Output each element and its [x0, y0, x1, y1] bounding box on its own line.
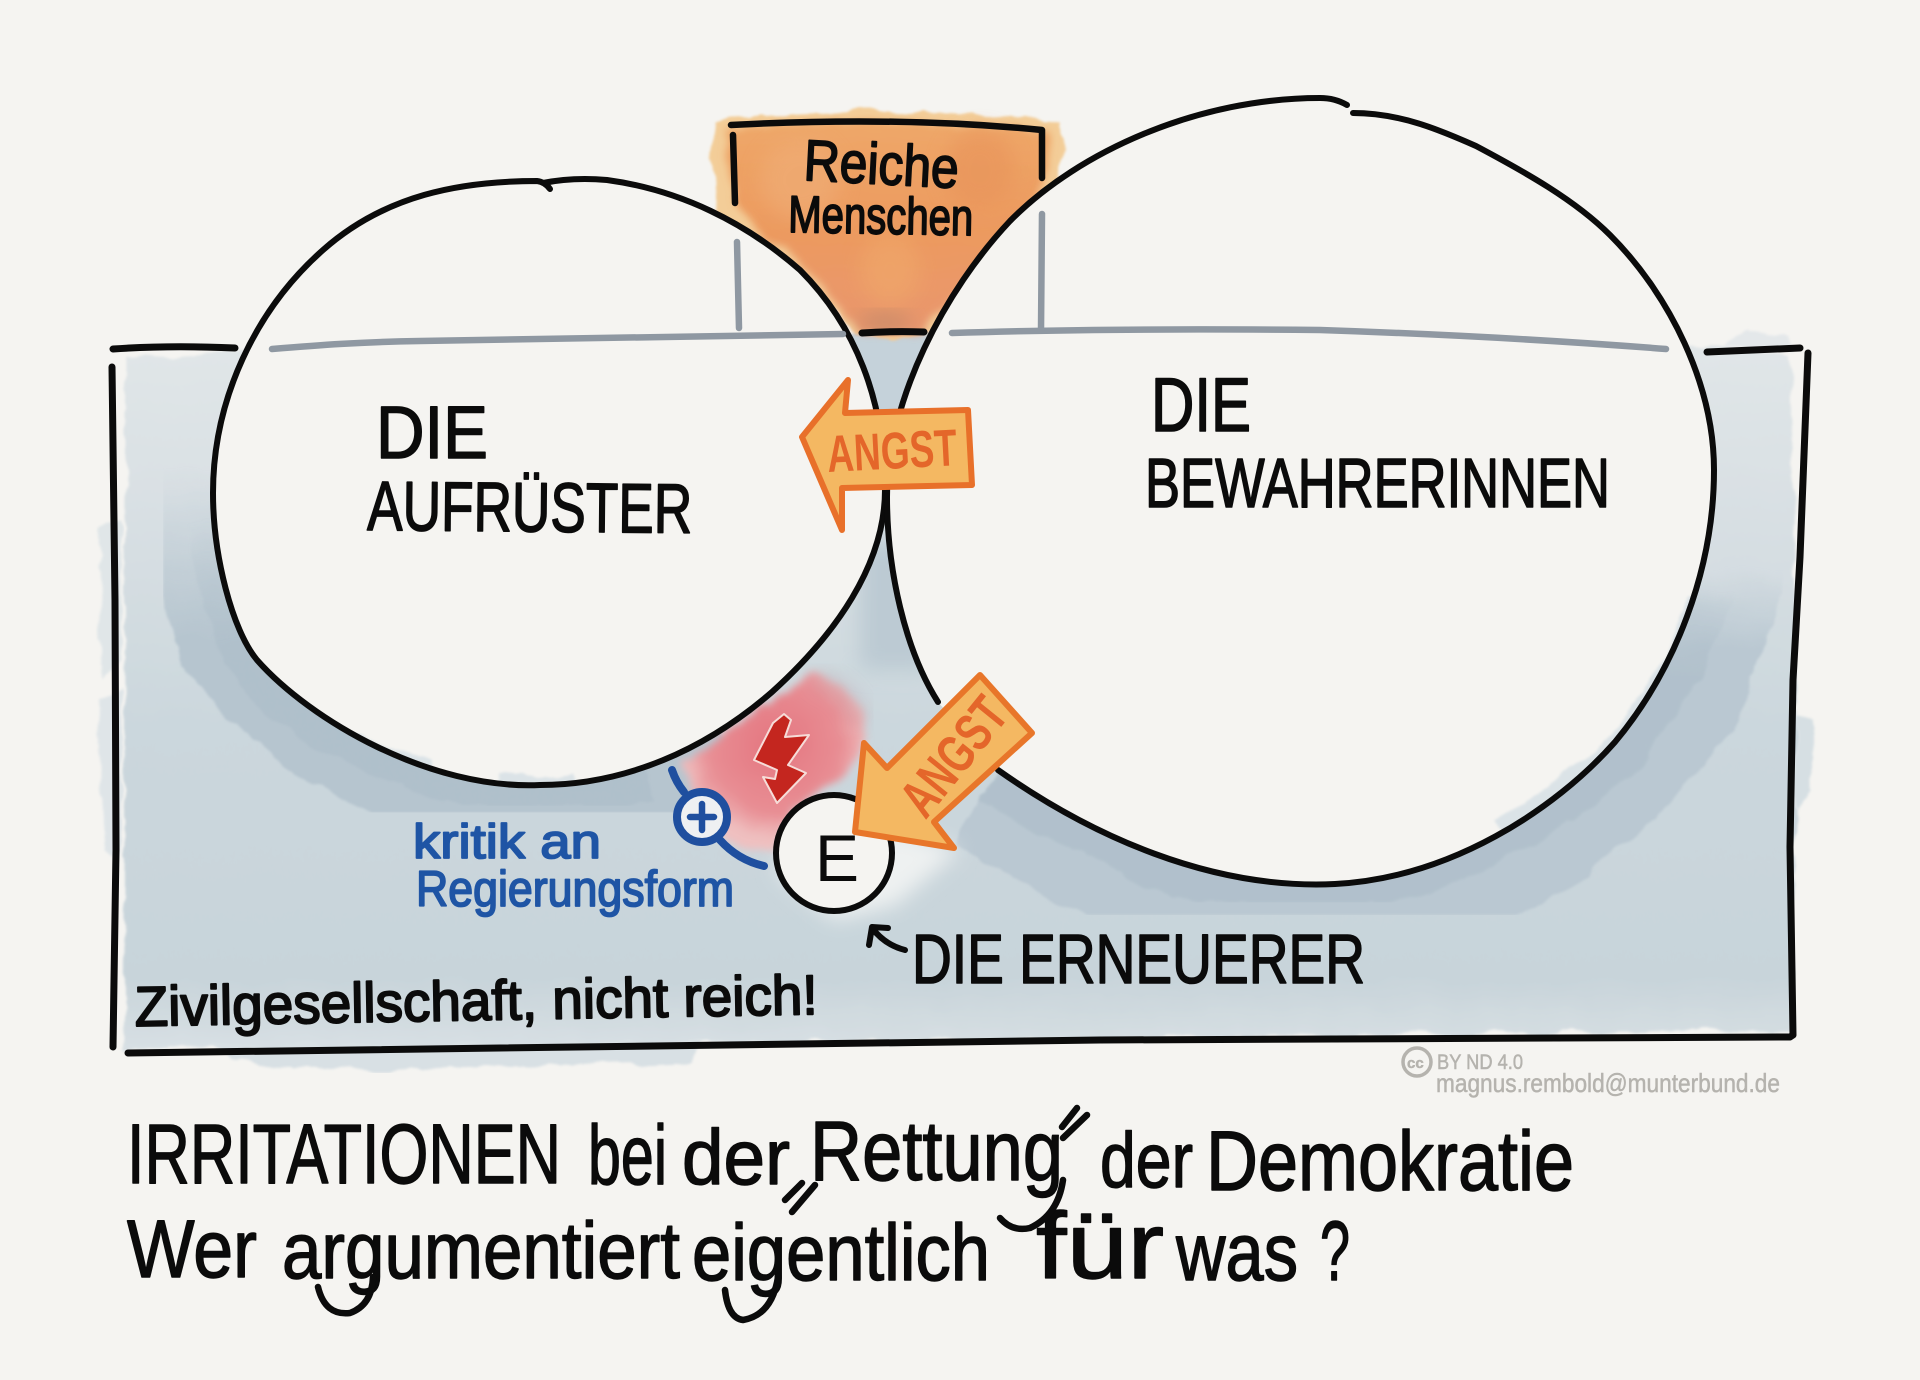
text: Die Aufrüster: AUFRÜSTER	[367, 467, 693, 548]
text: Kritik an Regierungsform: Regierungsform	[416, 861, 734, 917]
text: Die Erneuerer with pointer: DIE ERNEUERER	[912, 920, 1365, 998]
title: Rettung	[810, 1104, 1063, 1198]
title	[127, 1104, 1574, 1320]
text: Kritik an Regierungsform: kritik an	[413, 816, 601, 869]
text: Die Bewahrerinnen: DIE	[1151, 363, 1251, 448]
label: ANGST: ANGST	[888, 685, 1020, 828]
panel: red conflict wash	[684, 673, 865, 853]
text: Die Bewahrerinnen: BEWAHRERINNEN	[1145, 444, 1610, 522]
circle: E	[776, 795, 892, 911]
title: was	[1175, 1207, 1298, 1298]
title: der	[1100, 1116, 1193, 1204]
conflict lightning bolt	[754, 714, 809, 803]
text: Reiche Menschen: Reiche	[802, 128, 961, 201]
title: Demokratie	[1206, 1114, 1574, 1208]
circle: Die Aufrüster	[213, 179, 885, 785]
title: Wer	[127, 1204, 257, 1295]
circle: Die Bewahrerinnen	[887, 98, 1714, 884]
title: bei	[588, 1108, 667, 1202]
title: eigentlich	[692, 1208, 990, 1297]
text: civil society label: Zivilgesellschaft, nicht reich!	[134, 963, 818, 1038]
label: ANGST: ANGST	[826, 419, 959, 484]
text: Die Aufrüster	[367, 391, 693, 548]
bracket: top of rich people's house	[731, 121, 1042, 203]
credit: licence and author: magnus.rembold@munterbund.de	[1436, 1068, 1780, 1098]
title: argumentiert	[282, 1206, 680, 1295]
credit: licence and author: cc	[1407, 1055, 1424, 1072]
text: Kritik an Regierungsform	[413, 816, 734, 917]
black box outline	[112, 332, 1808, 1053]
text: Die Bewahrerinnen	[1145, 363, 1610, 522]
title: für	[1036, 1193, 1164, 1298]
text: Reiche Menschen	[788, 128, 974, 247]
credit: licence and author: BY ND 4.0	[1437, 1051, 1523, 1074]
arrow: Angst toward Aufrüster	[802, 380, 972, 530]
title: ?	[1320, 1204, 1350, 1298]
text: Die Aufrüster: DIE	[376, 391, 488, 474]
credit: licence and author	[1403, 1048, 1780, 1098]
text: Reiche Menschen: Menschen	[788, 186, 974, 247]
panel: civil society watercolour wash	[96, 328, 1815, 1070]
arrow: Angst toward Erneuerer	[855, 675, 1032, 848]
circle: E: E	[815, 821, 859, 895]
title: der	[682, 1113, 790, 1201]
grey building outline	[272, 214, 1666, 349]
blue government-form arc with plus	[672, 770, 764, 866]
title: IRRITATIONEN	[127, 1107, 561, 1201]
panel: rich people orange funnel wash	[711, 112, 1064, 338]
